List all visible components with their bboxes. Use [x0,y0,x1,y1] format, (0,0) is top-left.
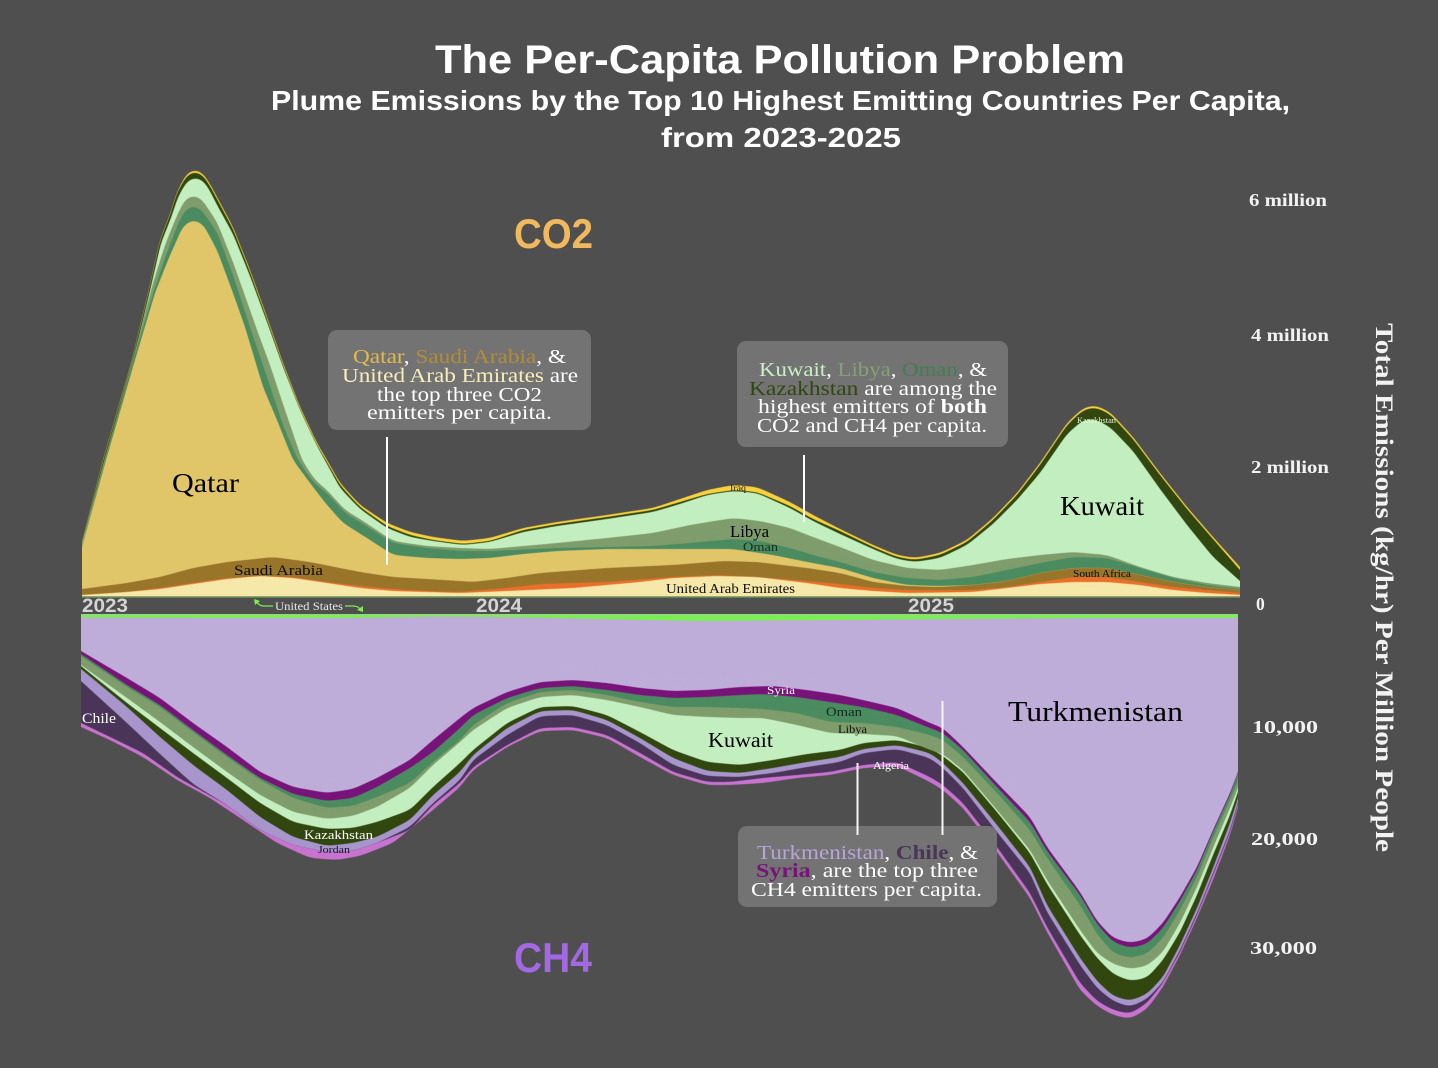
CH4 country labels: Libya [838,722,868,736]
year labels: 2024 [476,596,522,617]
CO2 stream chart [82,170,1240,598]
subtitle [271,85,1290,153]
layer: South Africa [82,575,1240,596]
subtitle: from 2023-2025 [661,122,901,153]
layer: Kuwait [81,664,1238,980]
layer: Saudi Arabia [82,557,1240,595]
heading: CO2: CO2 [514,210,593,257]
layer: Syria [81,650,1238,948]
layer: Kazakhstan [82,172,1240,582]
CO2 country labels [172,416,1145,596]
callout leader: CO2 [386,437,388,565]
CH4 country labels: Kuwait [708,728,773,752]
title: The Per-Capita Pollution Problem [435,38,1125,82]
callout: top CH4 emitters [738,826,997,907]
callout: top CO2 emitters: United Arab Emirates are [342,365,578,387]
callout: both gases [737,341,1008,447]
layer: Libya [81,656,1238,968]
layer: United States [81,614,1238,621]
CO2 country labels: Qatar [172,468,239,498]
layer: Oman [81,654,1238,958]
y axis tick labels: 4 million [1251,325,1329,345]
CH4 stream chart [81,614,1238,1018]
y axis tick labels: 0 [1256,594,1265,614]
United States label with arrows [254,599,363,613]
CO2 country labels: Kazakhstan [1077,416,1116,425]
layer: United Arab Emirates [82,576,1240,596]
callout leaders: CH4 [856,701,944,835]
year labels: 2023 [82,596,128,617]
CH4 country labels: Algeria [873,760,909,772]
CO2 country labels: Saudi Arabia [234,563,323,579]
CH4 country labels: Turkmenistan [1008,697,1183,728]
heading: CH4: CH4 [514,934,593,981]
layer: Chile [81,680,1238,1013]
callout: top CO2 emitters: the top three CO2 [377,384,542,406]
CH4 country labels: Chile [82,711,116,727]
layer: Jordan [81,668,1238,1006]
y axis tick labels: 20,000 [1251,829,1318,849]
CH4 country labels: Kazakhstan [304,827,374,842]
layer: Libya [82,196,1240,590]
layer: Kazakhstan [81,666,1238,1000]
callout: both gases: highest emitters of both [758,396,987,418]
CO2 country labels: Iraq [730,483,747,493]
layer: Kuwait [82,178,1240,588]
layer: Iraq [82,170,1240,570]
year labels: 2025 [908,596,954,617]
callout: both gases: Kuwait , Libya , Oman , & [759,359,987,381]
y axis tick labels [1249,190,1329,958]
callout: top CH4 emitters: Turkmenistan , Chile , & [757,842,979,864]
CO2 country labels: South Africa [1073,569,1132,580]
CH4 country labels [82,683,1183,856]
subtitle: Plume Emissions by the Top 10 Highest Emitting Countries Per Capita, [271,85,1290,116]
CH4 country labels: Jordan [318,844,351,856]
CH4 country labels: Syria [767,683,796,697]
CO2 country labels: United Arab Emirates [666,581,795,596]
CO2 country labels: Libya [730,522,769,541]
callout: top CH4 emitters: Syria , are the top three [756,860,978,882]
callout leader: both gases [803,455,805,522]
CO2 country labels: Oman [743,539,779,554]
callout: both gases: CO2 and CH4 per capita. [757,415,987,437]
y axis tick labels: 10,000 [1252,717,1318,737]
United States label with arrows: United States [275,601,344,613]
layer: Qatar [82,221,1240,590]
callout: top CO2 emitters [328,330,591,430]
layer: Algeria [81,722,1238,1018]
layer: United States [82,596,1240,598]
CH4 country labels: Oman [826,704,863,719]
callout: top CO2 emitters: Qatar , Saudi Arabia , & [353,346,567,368]
year labels [82,596,954,617]
callout: top CH4 emitters: CH4 emitters per capita. [751,879,982,901]
y axis tick labels: 2 million [1251,457,1329,477]
callout: top CO2 emitters: emitters per capita. [367,402,552,424]
y axis tick labels: 6 million [1249,190,1327,210]
CO2 country labels: Kuwait [1060,491,1145,521]
y axis tick labels: 30,000 [1250,938,1317,958]
layer: Turkmenistan [81,614,1238,942]
y axis title: Total Emissions (kg/hr) Per Million People [1370,323,1397,852]
callout: both gases: Kazakhstan are among the [749,378,997,400]
layer: Oman [82,207,1240,590]
